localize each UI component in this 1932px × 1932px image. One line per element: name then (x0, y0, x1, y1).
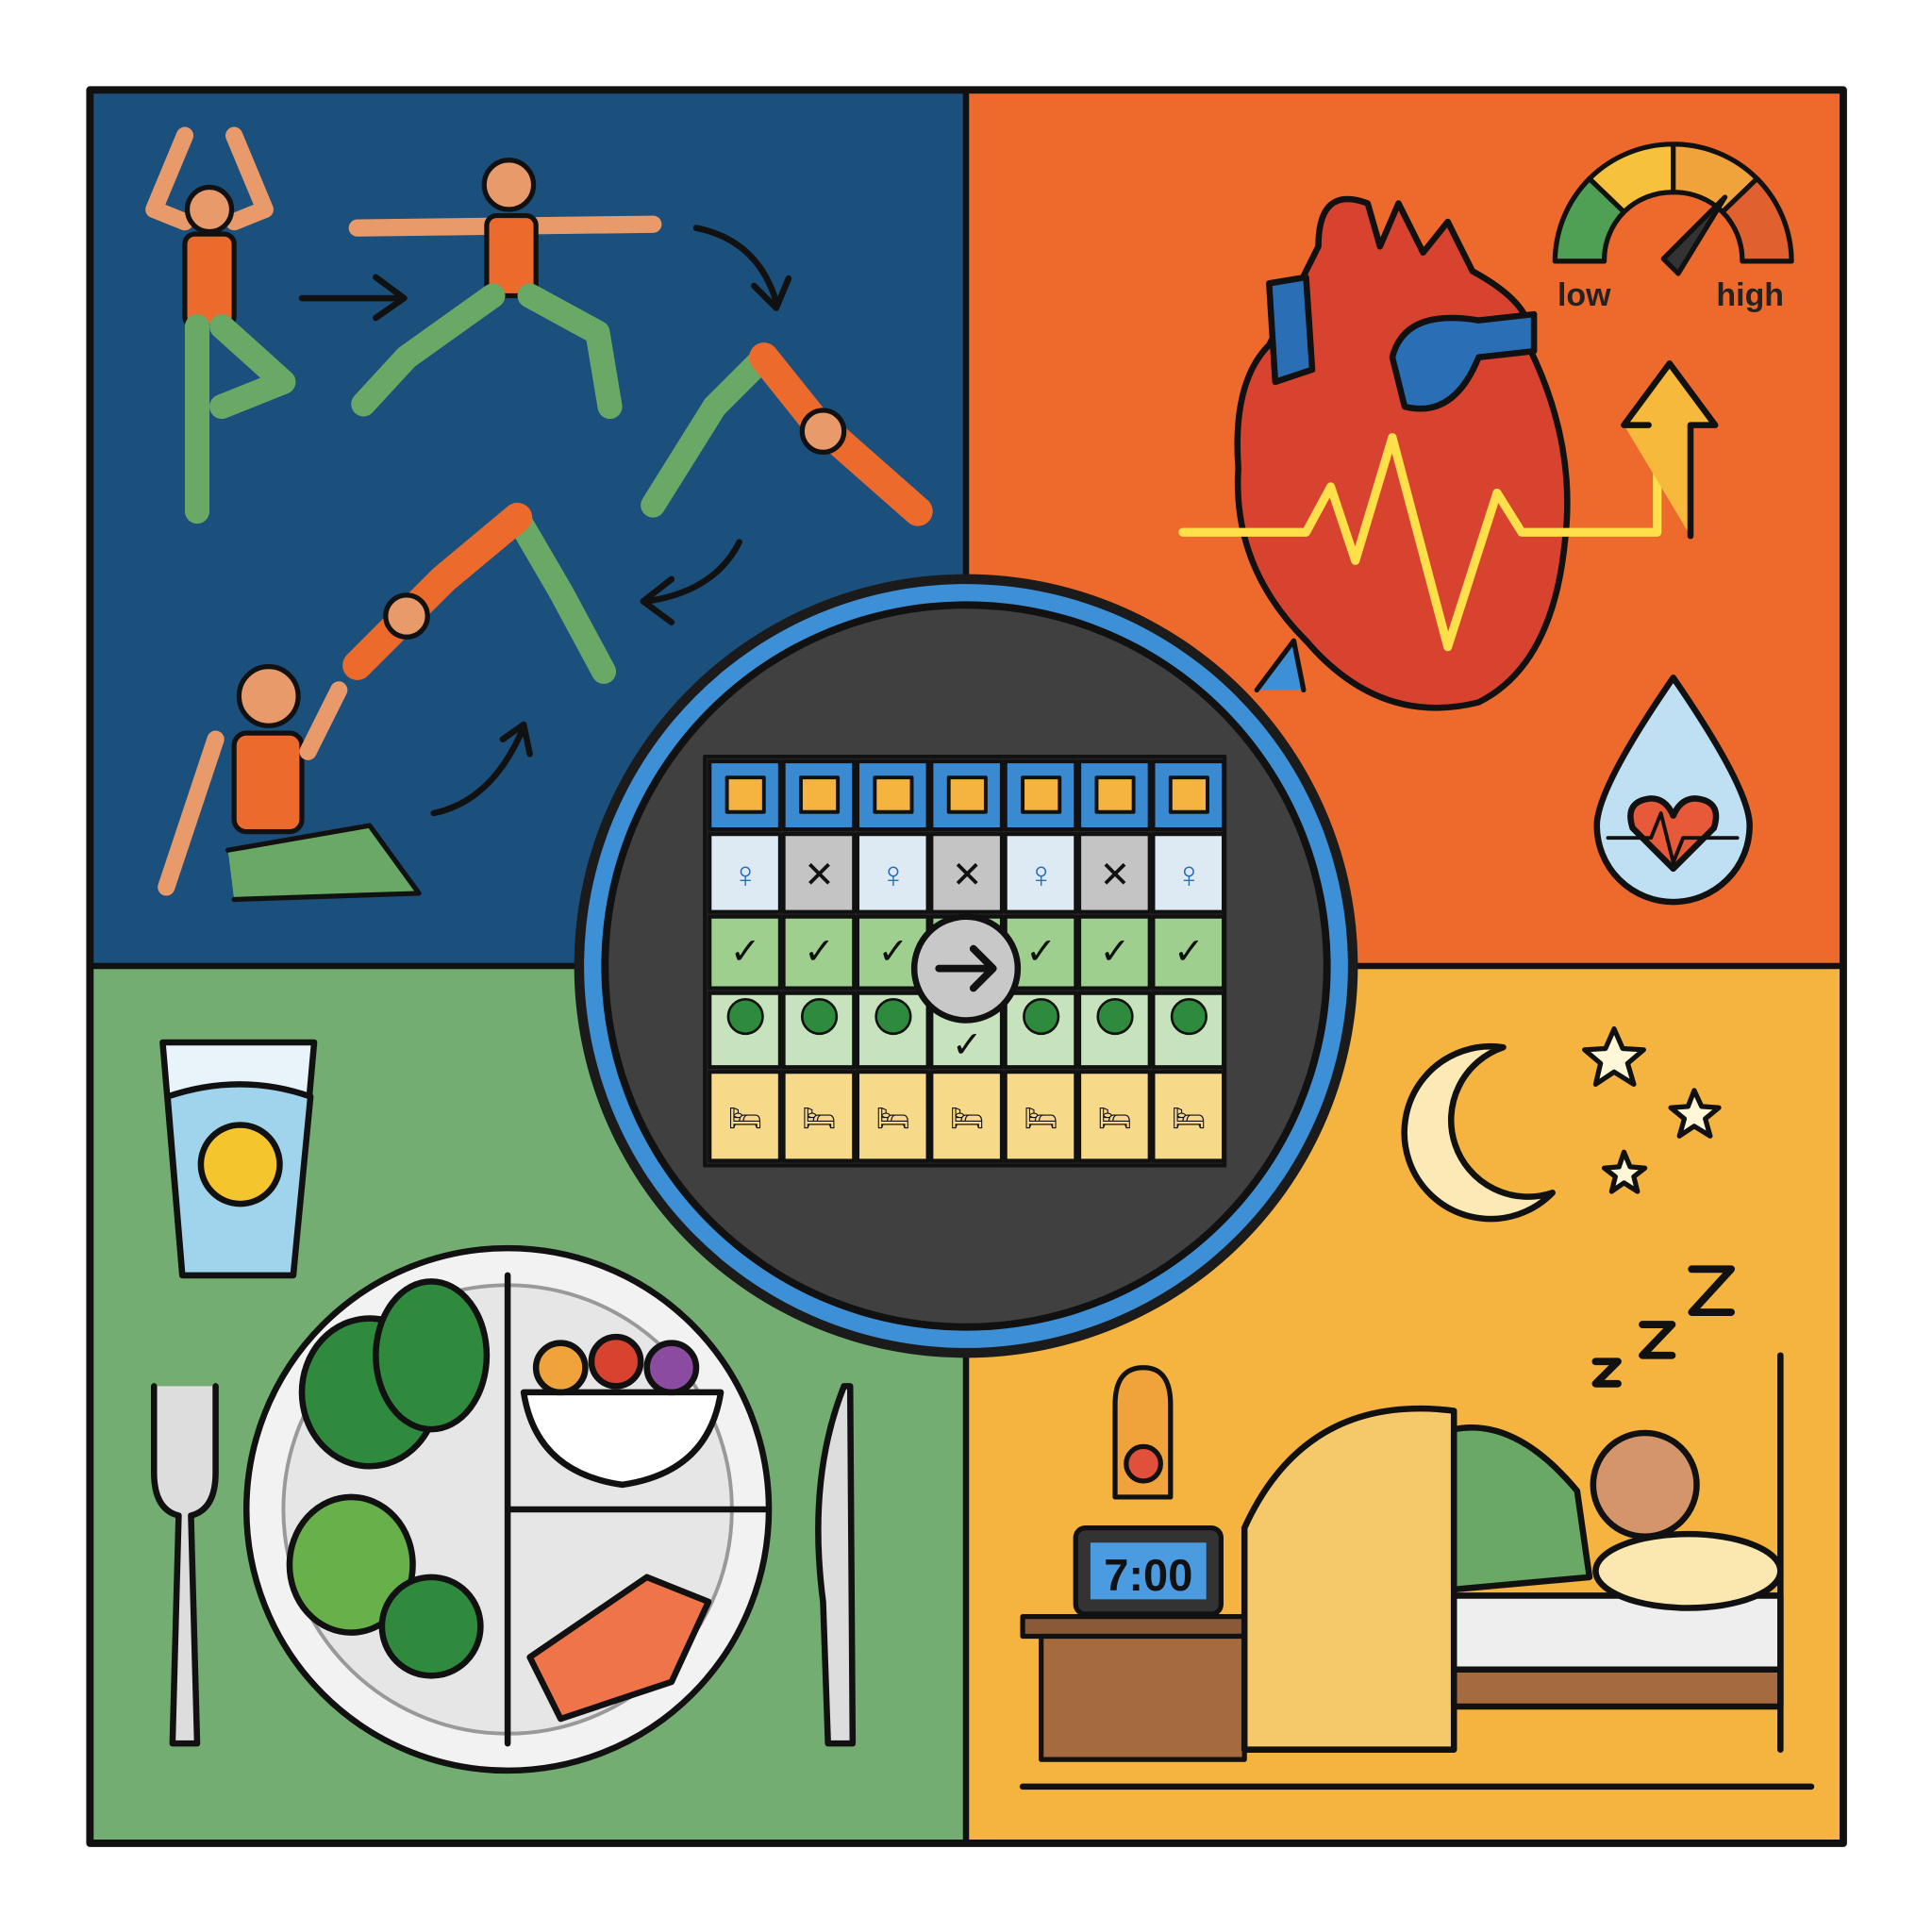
panel: nutrition (bottom-left) (92, 969, 965, 1842)
center circle: weekly routine calendar (575, 575, 1357, 1357)
center circle: weekly routine calendar: 🛏 (1098, 1104, 1132, 1134)
bed and sleeper (1023, 1356, 1811, 1787)
icon: alarm clock: 7:00 (1104, 1550, 1192, 1600)
panel: heart health (top-right) (969, 92, 1842, 965)
icon: plate (246, 1248, 769, 1771)
icon: alarm clock (1075, 1528, 1221, 1614)
icon: heart (1238, 199, 1567, 708)
yoga figure 3: downward dog (653, 358, 918, 511)
center circle: weekly routine calendar: 🛏 (950, 1104, 985, 1134)
arrow (302, 277, 404, 318)
center circle: weekly routine calendar: 🛏 (876, 1104, 910, 1134)
yoga figure 5: seated twist (166, 667, 419, 899)
calendar row icons: ✕ (804, 855, 835, 895)
center circle: weekly routine calendar: 🛏 (1024, 1104, 1058, 1134)
calendar row icons: ✓ (1174, 931, 1205, 972)
calendar row icons: ✕ (952, 855, 983, 895)
calendar grid (705, 757, 1224, 1166)
icon: glass of water (162, 1042, 314, 1275)
panel: sleep (bottom-right) (969, 969, 1842, 1842)
ring arrow (1257, 641, 1304, 690)
panel: heart health (top-right): high (1716, 277, 1784, 313)
calendar row icons: ♀ (732, 855, 759, 895)
icon: stars (1585, 1029, 1719, 1191)
icon: moon (1405, 1046, 1553, 1219)
calendar row icons: ✓ (730, 931, 761, 972)
salmon (530, 1577, 708, 1719)
center circle: weekly routine calendar: 🛏 (1172, 1104, 1207, 1134)
arrow up (1624, 363, 1715, 536)
calendar row icons: ♀ (1175, 855, 1203, 895)
yoga figure 4 (358, 518, 604, 672)
greens (302, 1319, 438, 1466)
icon: fork (154, 1386, 216, 1743)
calendar row icons (730, 855, 1205, 1066)
calendar row icons: ✓ (1100, 931, 1130, 972)
center circle: weekly routine calendar: 🛏 (728, 1104, 762, 1134)
calendar row icons: ♀ (879, 855, 908, 895)
panel: yoga (top-left) (92, 92, 965, 965)
yoga figure 1: tree pose (154, 136, 283, 511)
calendar row icons: ✓ (952, 1025, 983, 1066)
icon: door hanger (1115, 1368, 1171, 1497)
ekg line (1183, 419, 1657, 647)
calendar row icons: ✕ (1100, 855, 1130, 895)
calendar row icons: ✓ (804, 931, 835, 972)
calendar row icons: ♀ (1027, 855, 1055, 895)
gauge labels: low (1557, 277, 1611, 313)
calendar row icons: ✓ (878, 931, 908, 972)
nightstand (1023, 1617, 1269, 1759)
gauge (1555, 144, 1791, 274)
center arrow button (914, 917, 1018, 1020)
calendar row icons: ✓ (1025, 931, 1057, 972)
zzz (1595, 1269, 1731, 1384)
icon: water drop with heart (1597, 677, 1750, 902)
center circle: weekly routine calendar: 🛏 (802, 1104, 837, 1134)
icon: knife (818, 1386, 853, 1743)
yoga figure 2: warrior (358, 160, 653, 407)
bowl (524, 1392, 721, 1485)
